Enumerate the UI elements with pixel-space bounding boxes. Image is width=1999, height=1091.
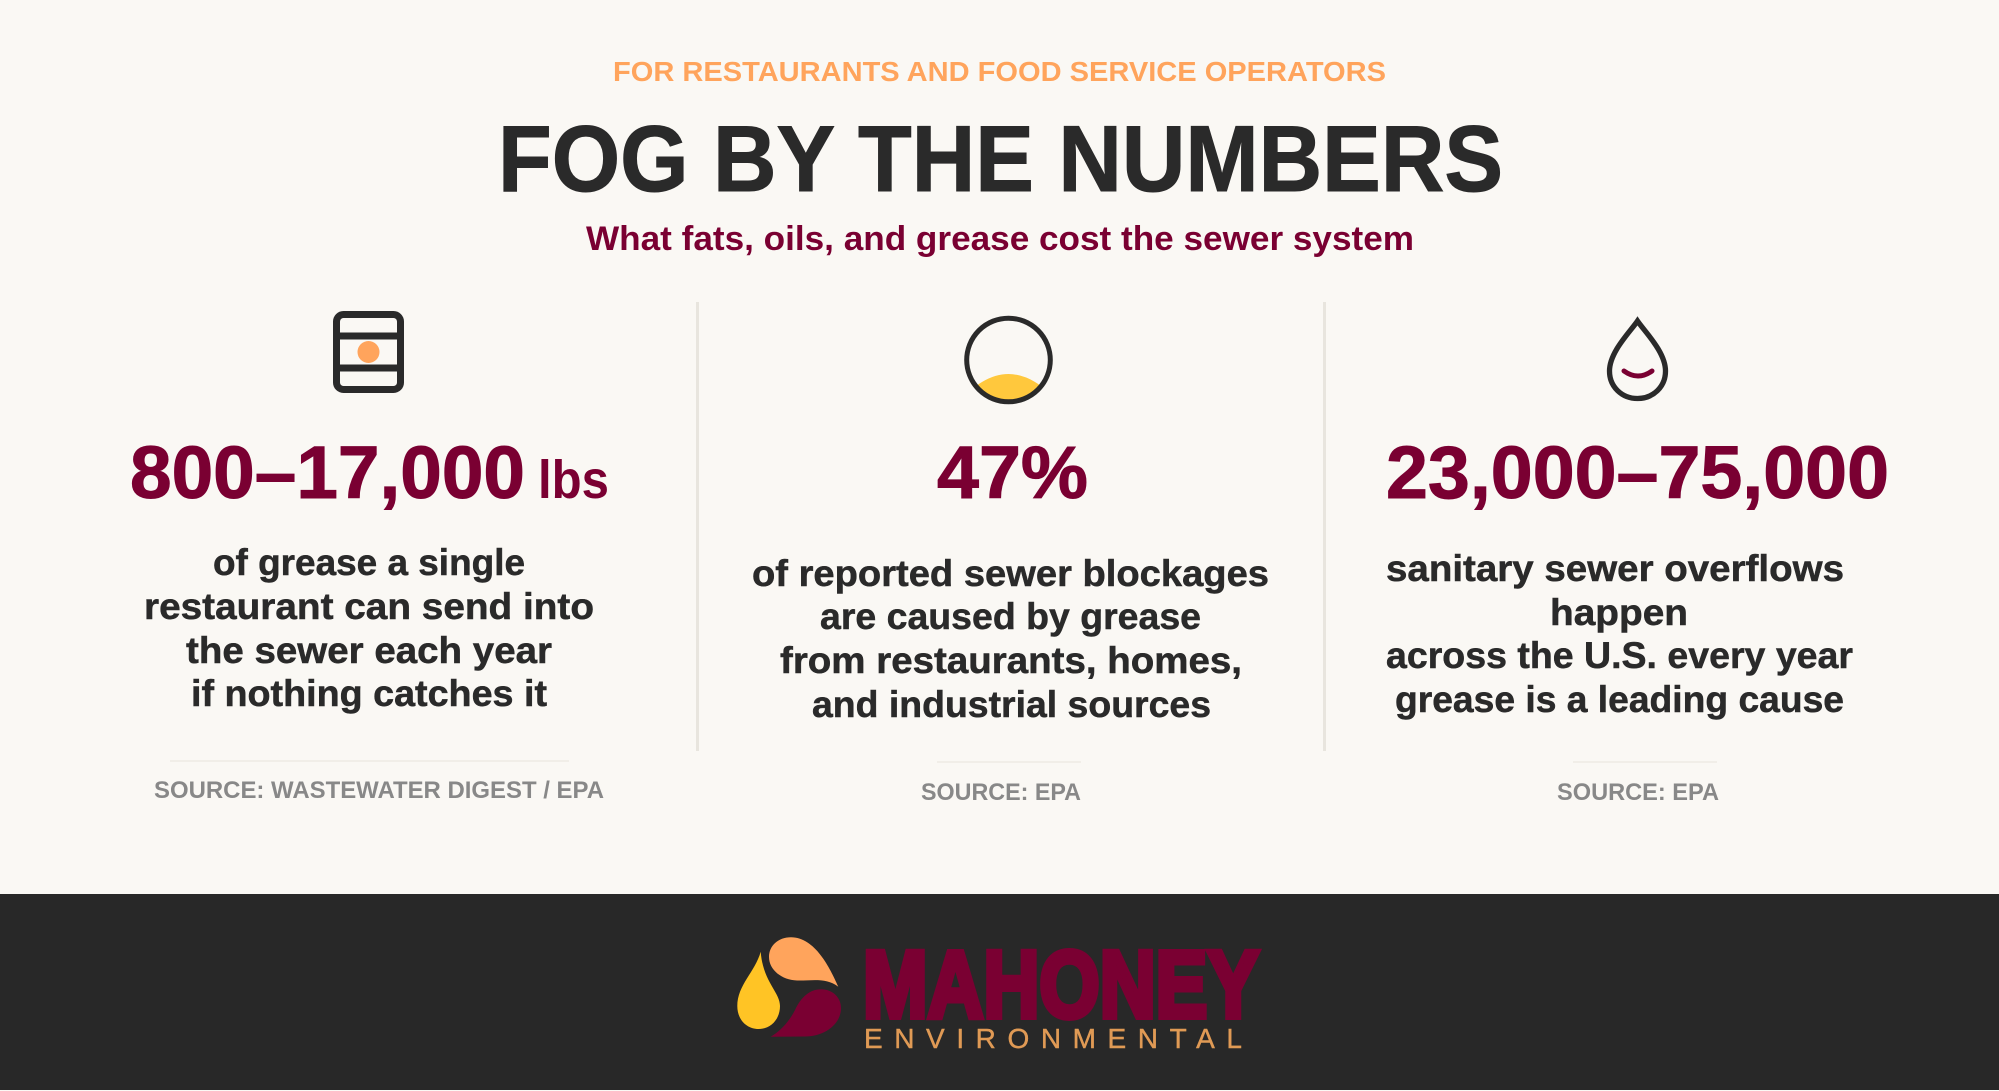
- description: sewer overflows: grease is a leading cause: [1395, 679, 1844, 720]
- description: sewer blockages: [752, 553, 1269, 725]
- footer band: [0, 894, 1999, 1090]
- logo mark: three drops: [737, 937, 841, 1037]
- divider lines: [696, 302, 1326, 751]
- logo wordmark: MAHONEY: [863, 932, 1259, 1038]
- stat: pounds of grease: lbs: [538, 450, 609, 510]
- description: sewer blockages: of reported sewer blockages: [752, 553, 1269, 594]
- source: EPA: SOURCE: EPA: [1557, 779, 1719, 806]
- panel: sewer overflows: [1386, 321, 1889, 806]
- source: EPA: SOURCE: EPA: [921, 779, 1081, 806]
- stat: pounds of grease: 800–17,000: [130, 431, 525, 514]
- description: sewer overflows: [1386, 548, 1853, 720]
- description: sewer overflows: across the U.S. every year: [1386, 635, 1853, 676]
- source: wastewater digest: SOURCE: WASTEWATER DIGEST / EPA: [154, 777, 604, 804]
- icon: drop: [1610, 321, 1666, 398]
- description: sewer blockages: are caused by grease: [820, 596, 1201, 637]
- icon: pipe with grease: [967, 318, 1050, 402]
- description: grease per restaurant: [144, 542, 594, 714]
- panel: grease per restaurant: [130, 314, 609, 804]
- description: sewer overflows: happen: [1550, 592, 1688, 633]
- subtitle: What fats, oils, and grease cost the sewer system: [586, 220, 1414, 258]
- title: FOG BY THE NUMBERS: [498, 106, 1503, 211]
- description: grease per restaurant: of grease a single: [213, 542, 525, 583]
- panel: sewer blockages: [752, 318, 1269, 806]
- logo wordmark: ENVIRONMENTAL: [864, 1023, 1242, 1054]
- description: grease per restaurant: if nothing catches it: [191, 673, 547, 714]
- stat: 47 percent: 47%: [937, 431, 1088, 514]
- icon: oven: [336, 314, 401, 390]
- description: grease per restaurant: restaurant can send into: [144, 586, 594, 627]
- stat: overflow count: 23,000–75,000: [1386, 431, 1889, 514]
- eyebrow: audience line: FOR RESTAURANTS AND FOOD SERVICE OPERATORS: [613, 56, 1386, 87]
- description: sewer overflows: sanitary sewer overflows: [1386, 548, 1844, 589]
- description: sewer blockages: from restaurants, homes,: [780, 640, 1242, 681]
- description: grease per restaurant: the sewer each year: [186, 630, 552, 671]
- description: sewer blockages: and industrial sources: [812, 684, 1211, 725]
